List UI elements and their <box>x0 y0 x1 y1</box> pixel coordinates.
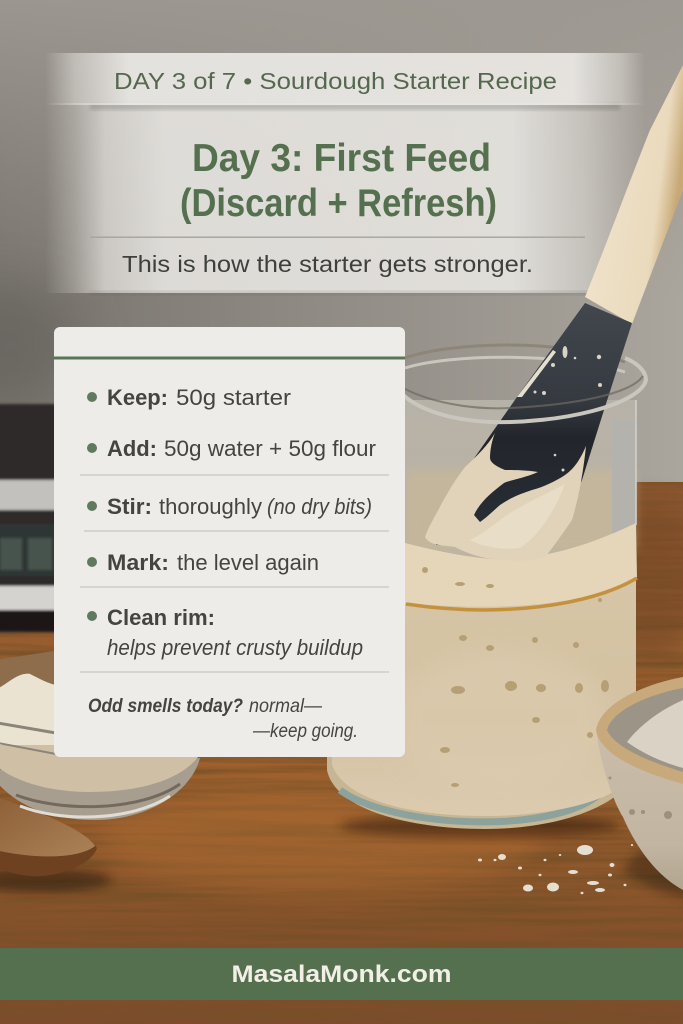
item: add: 50g water + 50g flour <box>164 436 376 461</box>
note: odd smells: normal— <box>249 696 323 717</box>
item: clean rim: Clean rim: <box>107 605 215 630</box>
item: mark <box>87 550 319 575</box>
title <box>180 137 497 225</box>
subtitle: This is how the starter gets stronger. <box>122 251 533 277</box>
glass bowl of flour, left <box>0 650 200 820</box>
dough on the blade <box>425 433 586 561</box>
card background <box>54 327 405 757</box>
footer band: MasalaMonk.com <box>232 961 452 988</box>
wooden table <box>0 482 683 1024</box>
jar shadow <box>340 814 620 838</box>
item: stir: Stir: <box>107 494 152 519</box>
header soft panel <box>45 103 645 295</box>
starter, upper foam layer <box>330 523 637 607</box>
flour mound <box>0 674 198 792</box>
spatula blade, dark <box>436 303 632 548</box>
starter bubbles <box>422 567 609 787</box>
glass jar with starter <box>327 345 637 838</box>
ceramic bowl of flour, right <box>596 677 683 898</box>
item: keep <box>87 385 291 410</box>
gold level mark <box>406 578 637 610</box>
note: odd smells: —keep going. <box>252 721 358 742</box>
kitchen scale in background <box>0 404 60 632</box>
title: (Discard + Refresh) <box>180 182 497 225</box>
bowl glass base <box>0 758 200 820</box>
starter, lower speckled layer <box>330 580 636 816</box>
item: add: Add: <box>107 436 157 461</box>
bowl body <box>597 735 683 890</box>
item: clean rim: helps prevent crusty buildup <box>107 635 363 660</box>
bowl back <box>0 650 60 740</box>
title: Day 3: First Feed <box>192 137 491 180</box>
front of jar rim <box>403 358 646 525</box>
day label band: DAY 3 of 7 • Sourdough Starter Recipe <box>114 68 557 94</box>
item: stir: thoroughly <box>159 494 262 519</box>
jar base glass <box>340 787 607 822</box>
bowl rim <box>596 677 683 784</box>
jar glass body <box>327 400 636 829</box>
note: odd smells <box>88 696 358 742</box>
item: mark: Mark: <box>107 550 169 575</box>
bowl interior <box>607 688 683 772</box>
back of jar rim <box>405 345 625 372</box>
checklist card <box>54 327 405 757</box>
wooden spoon, left <box>0 796 112 892</box>
bowl rim lines <box>0 723 56 733</box>
background wall <box>0 0 683 640</box>
item: clean rim <box>87 605 363 660</box>
item: keep: 50g starter <box>176 385 291 410</box>
footer band <box>0 948 683 1000</box>
item: keep: Keep: <box>107 385 168 410</box>
item: mark: the level again <box>177 550 319 575</box>
bowl flour <box>627 700 683 768</box>
item: stir: (no dry bits) <box>267 494 372 519</box>
item: stir <box>87 494 372 519</box>
bowl speckles <box>608 776 672 819</box>
note: odd smells: Odd smells today? <box>88 696 243 717</box>
flour crumbs on table <box>478 844 633 894</box>
spoon handle, cream <box>585 65 683 324</box>
day label band <box>45 53 645 105</box>
header panel <box>45 53 645 295</box>
